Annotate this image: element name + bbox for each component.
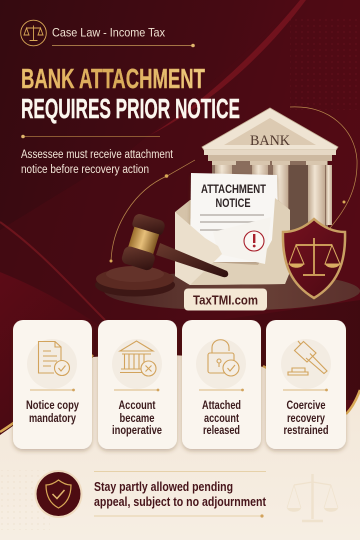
icon: envelope with notice (175, 173, 290, 285)
icon: bank with cross (120, 341, 156, 376)
alert icon (244, 231, 264, 251)
title: BANK ATTACHMENT (21, 63, 205, 94)
arrow rule (283, 389, 328, 391)
icon: document check (38, 342, 70, 376)
website badge: TaxTMI.com (193, 292, 258, 308)
label: inoperative (112, 425, 162, 437)
label: recovery (287, 413, 325, 425)
label: released (203, 425, 240, 437)
icon: padlock check (208, 340, 239, 376)
illustration base (104, 272, 360, 310)
conclusion text (94, 472, 267, 518)
label: restrained (284, 425, 328, 437)
notice paper (190, 173, 279, 262)
header: category label (21, 20, 195, 47)
conclusion text: appeal, subject to no adjournment (94, 494, 267, 509)
website badge (184, 288, 267, 310)
label: Notice copy (26, 400, 79, 412)
panel: notice copy (13, 320, 92, 449)
subtitle (21, 149, 174, 176)
notice heading: ATTACHMENT (201, 184, 266, 196)
header rule (52, 44, 195, 47)
decorative arcs (110, 107, 357, 262)
category text: Case Law - Income Tax (52, 26, 165, 40)
notice heading (201, 184, 266, 210)
label: Coercive (286, 400, 326, 412)
icon: gavel (95, 213, 228, 296)
notice heading: NOTICE (216, 198, 251, 210)
arrow rule (30, 389, 75, 391)
icon: bank building (202, 108, 338, 235)
label (26, 400, 79, 425)
label: Attached (202, 400, 241, 412)
panel: account released (182, 320, 261, 449)
label: mandatory (29, 413, 76, 425)
title (21, 63, 240, 124)
label (284, 400, 328, 437)
bank label: BANK (250, 133, 290, 149)
arrow rule (199, 389, 244, 391)
watermark: scales (287, 474, 338, 521)
icon: shield check badge (34, 470, 82, 518)
icon: shield with scales (283, 219, 345, 298)
icon: scales in circle (21, 20, 46, 46)
icon: gavel outline (288, 341, 327, 375)
panel: recovery restrained (266, 320, 346, 449)
label: account (204, 413, 239, 425)
label: became (120, 413, 154, 425)
subtitle: Assessee must receive attachment (21, 149, 174, 161)
label (202, 400, 241, 437)
label (112, 400, 162, 437)
subtitle: notice before recovery action (21, 164, 149, 176)
conclusion text: Stay partly allowed pending (94, 479, 233, 494)
arrow rule (114, 389, 159, 391)
label: Account (118, 400, 156, 412)
panel: account inoperative (98, 320, 177, 449)
divider (21, 135, 160, 138)
